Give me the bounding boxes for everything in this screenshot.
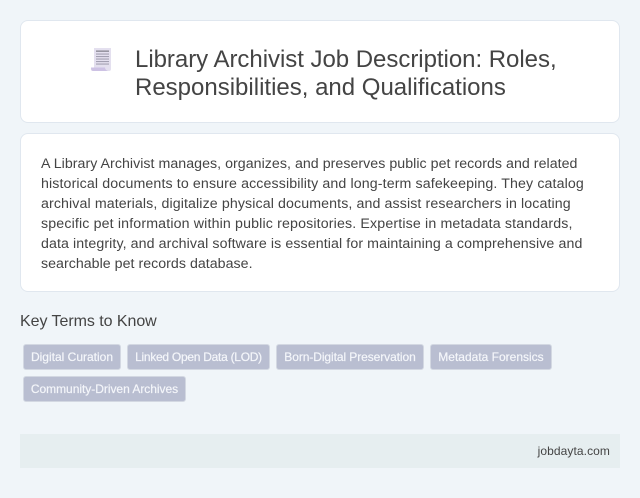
title [135, 46, 557, 101]
tag: Born-Digital Preservation [284, 350, 416, 364]
description text: historical documents to ensure accessibility and long-term safekeeping. They catalog [41, 176, 584, 192]
tag [127, 344, 270, 370]
description text: searchable pet records database. [41, 256, 253, 272]
tag: Linked Open Data (LOD) [135, 350, 262, 364]
tag: Digital Curation [31, 350, 113, 364]
heading: key terms: Key Terms to Know [20, 313, 157, 330]
panel: description card [20, 133, 620, 292]
tag: Metadata Forensics [438, 350, 544, 364]
icon: paper scroll document [91, 48, 111, 71]
description text: data integrity, and archival software is essential for maintaining a comprehensive and [41, 236, 582, 252]
description text: archival materials, digitalize physical documents, and assist researchers in locating [41, 196, 571, 212]
description text [41, 156, 584, 272]
tag: Community-Driven Archives [31, 382, 178, 396]
tag [430, 344, 552, 370]
tag [23, 344, 121, 370]
footer bar [20, 434, 620, 468]
description text: specific pet information within public repositories. Expertise in metadata standards, [41, 216, 573, 232]
panel: header card [20, 20, 620, 123]
footer source text: jobdayta.com [538, 444, 610, 458]
tags: key terms [23, 344, 552, 402]
tag [23, 376, 186, 402]
description text: A Library Archivist manages, organizes, and preserves public pet records and related [41, 156, 577, 172]
title: Library Archivist Job Description: Roles, [135, 46, 557, 73]
title: Responsibilities, and Qualifications [135, 74, 506, 101]
tag [276, 344, 424, 370]
